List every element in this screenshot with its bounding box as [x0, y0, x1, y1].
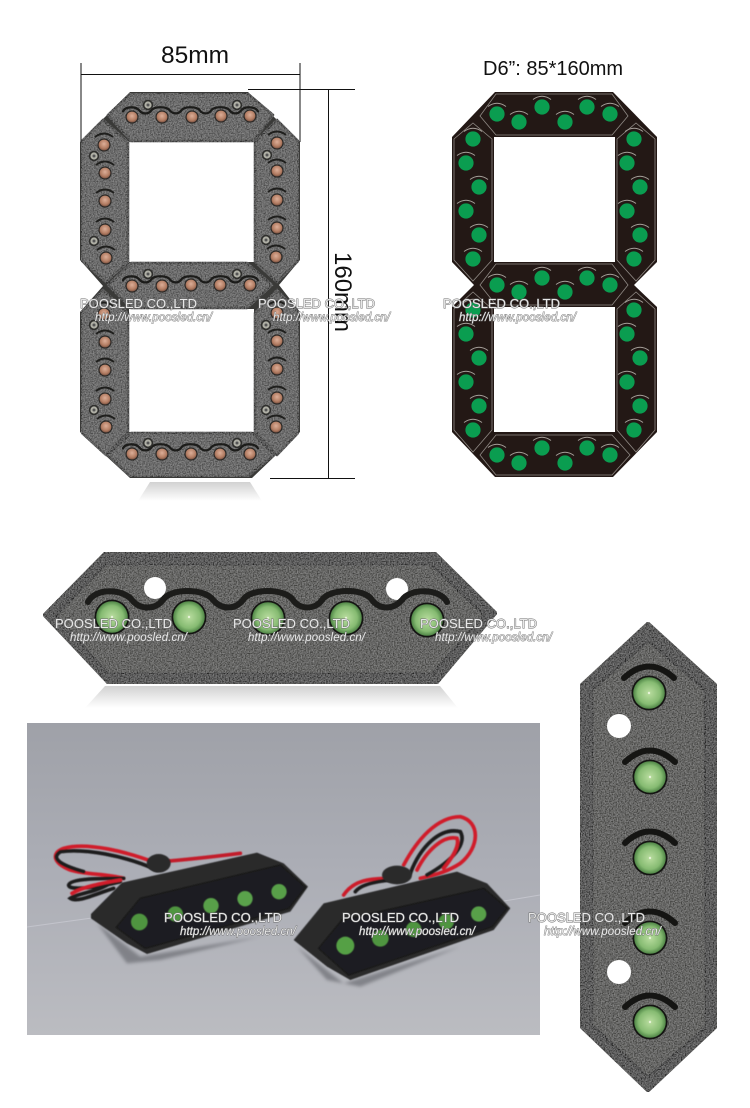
- mounting holes: [607, 714, 631, 984]
- watermarks: POOSLED CO.,LTD: [233, 616, 350, 631]
- watermarks: http://www.poosled.cn/: [70, 632, 189, 644]
- watermarks: http://www.poosled.cn/: [180, 926, 298, 938]
- watermarks: POOSLED CO.,LTD: [80, 296, 197, 311]
- right module: [294, 872, 510, 980]
- right module LEDs: [336, 906, 486, 955]
- watermarks: http://www.poosled.cn/: [95, 312, 214, 324]
- module shadows: [97, 923, 460, 987]
- vertical segment photo: [580, 622, 717, 1092]
- watermarks: POOSLED CO.,LTD: [528, 910, 645, 925]
- photo of two LED modules: [27, 723, 540, 1035]
- LEDs with arcs: [624, 666, 675, 1040]
- green LEDs: [94, 600, 444, 638]
- watermarks: http://www.poosled.cn/: [459, 312, 578, 324]
- size title: D6”: 85*160mm: [483, 58, 623, 80]
- dimension: width 85mm: 85mm: [161, 42, 229, 69]
- left module: [91, 853, 308, 954]
- dimension: width 85mm: [81, 42, 300, 142]
- watermarks: POOSLED CO.,LTD: [443, 296, 560, 311]
- right wires: [344, 817, 475, 895]
- watermarks: POOSLED CO.,LTD: [258, 296, 375, 311]
- dimension: height 160mm: [248, 89, 356, 478]
- horizontal segment photo: [43, 552, 497, 684]
- watermarks: http://www.poosled.cn/: [359, 926, 477, 938]
- left wires: [55, 846, 240, 900]
- left module LEDs: [131, 884, 287, 930]
- watermarks: POOSLED CO.,LTD: [420, 616, 537, 631]
- reflection under gray digit: [138, 482, 262, 501]
- watermarks: POOSLED CO.,LTD: [342, 910, 459, 925]
- gray seven-segment digit photo: [80, 92, 300, 478]
- watermarks: http://www.poosled.cn/: [435, 632, 554, 644]
- reflection under horizontal segment: [85, 686, 458, 708]
- watermarks: POOSLED CO.,LTD: [55, 616, 172, 631]
- watermarks: [55, 296, 663, 938]
- watermarks: http://www.poosled.cn/: [273, 312, 392, 324]
- watermarks: http://www.poosled.cn/: [544, 926, 663, 938]
- green diagram digit: [452, 92, 657, 477]
- dimension: height 160mm: 160mm: [329, 252, 356, 332]
- watermarks: http://www.poosled.cn/: [248, 632, 367, 644]
- watermarks: POOSLED CO.,LTD: [164, 910, 282, 925]
- mounting holes: [144, 577, 408, 600]
